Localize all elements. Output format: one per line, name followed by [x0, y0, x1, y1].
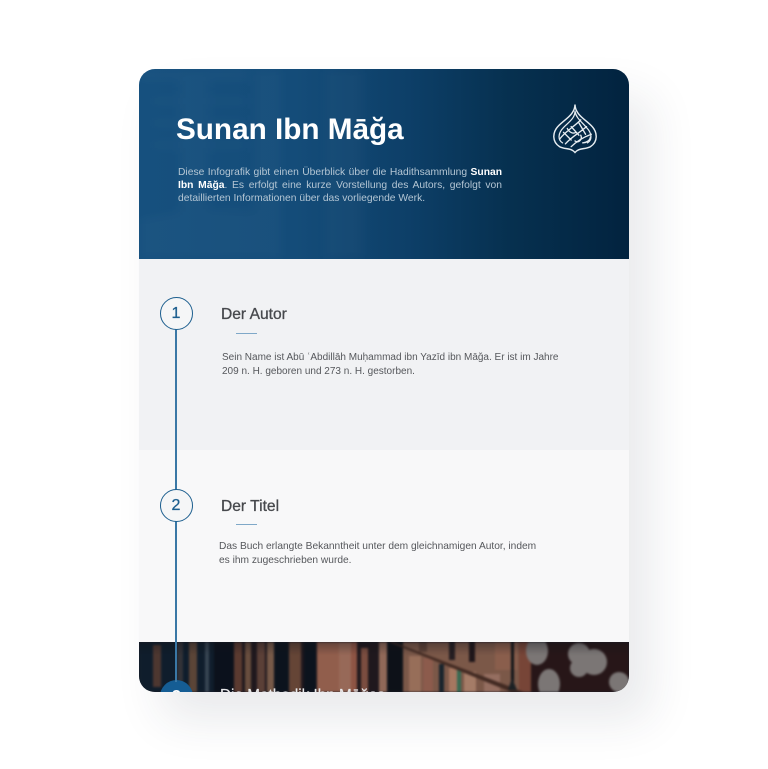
- body text: Der Autor: [222, 352, 558, 377]
- background texture: blurred architecture: [139, 69, 629, 259]
- card shadow: [139, 69, 629, 692]
- accent rule: [236, 524, 257, 525]
- body text: Der Autor: 209 n. H. geboren und 273 n. H. gestorben.: [222, 366, 415, 377]
- icon: calligraphy teardrop emblem: [553, 104, 597, 154]
- panel: Der Titel: [139, 450, 629, 642]
- intro text: Diese Infografik gibt einen Überblick über die Hadithsammlung Sunan Ibn Māğa. Es erfolgt eine kurze Vorstellung des Autors, gefolgt von detaillierten Informationen über das vorliegende Werk.: [178, 167, 502, 204]
- bookshelf illustration: [139, 642, 629, 692]
- body text: Der Autor: Sein Name ist Abū ʿAbdillāh Muḥammad ibn Yazīd ibn Māğa. Er ist im Jahre: [222, 352, 558, 363]
- body text: Der Titel: es ihm zugeschrieben wurde.: [219, 555, 352, 566]
- panel: Die Methodik, bookshelf photo: [139, 642, 629, 692]
- step badge 2: 2: [172, 497, 180, 514]
- heading: Der Autor: Der Autor: [221, 306, 287, 323]
- step badge 1: 1: [172, 305, 180, 322]
- step badge 3: [160, 680, 193, 713]
- title: Sunan Ibn Māğa: [176, 113, 404, 146]
- body text: Der Titel: Das Buch erlangte Bekanntheit unter dem gleichnamigen Autor, indem: [219, 541, 536, 552]
- body text: Der Titel: [219, 541, 536, 566]
- timeline connector: [175, 314, 177, 682]
- infographic card: [139, 69, 629, 692]
- heading: Der Titel: Der Titel: [221, 498, 279, 515]
- panel: Der Autor: [139, 259, 629, 450]
- step badge 2: [160, 489, 192, 522]
- step badge 1: [160, 297, 192, 330]
- panel: header: [139, 69, 629, 259]
- accent rule: [236, 333, 257, 334]
